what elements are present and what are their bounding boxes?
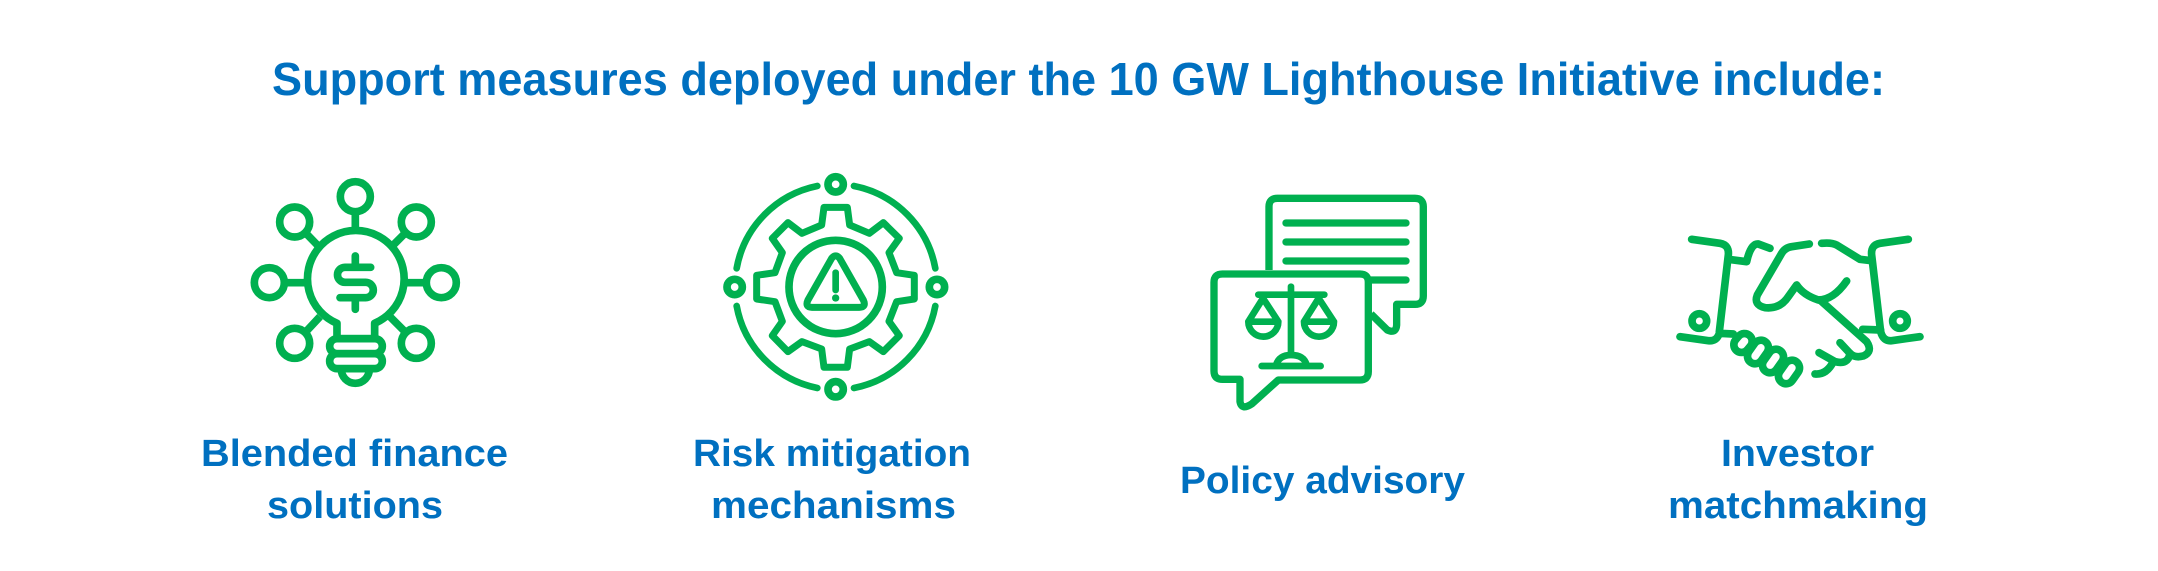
label: investor matchmaking: matchmaking — [1668, 485, 1928, 527]
icon: handshake — [1680, 239, 1920, 387]
label: blended finance solutions: Blended finance — [201, 433, 508, 475]
label: risk mitigation mechanisms — [693, 433, 971, 527]
label: risk mitigation mechanisms: mechanisms — [711, 485, 956, 527]
label: investor matchmaking: Investor — [1721, 433, 1874, 475]
panel: risk mitigation mechanisms — [693, 177, 971, 527]
panel: investor matchmaking — [1668, 239, 1928, 527]
label: risk mitigation mechanisms: Risk mitigation — [693, 433, 971, 475]
icon: gear with warning triangle inside a ring — [727, 177, 945, 397]
title: Support measures deployed under the 10 GW Lighthouse Initiative include: — [272, 53, 1885, 105]
label: blended finance solutions — [201, 433, 508, 527]
panel: policy advisory — [1180, 198, 1465, 502]
panel: blended finance solutions — [201, 182, 508, 527]
label: investor matchmaking — [1668, 433, 1928, 527]
label: blended finance solutions: solutions — [267, 485, 443, 527]
icon: light bulb with dollar sign and network nodes — [254, 182, 456, 383]
label: policy advisory: Policy advisory — [1180, 460, 1465, 502]
icon: speech bubbles with scales of justice — [1214, 198, 1423, 407]
